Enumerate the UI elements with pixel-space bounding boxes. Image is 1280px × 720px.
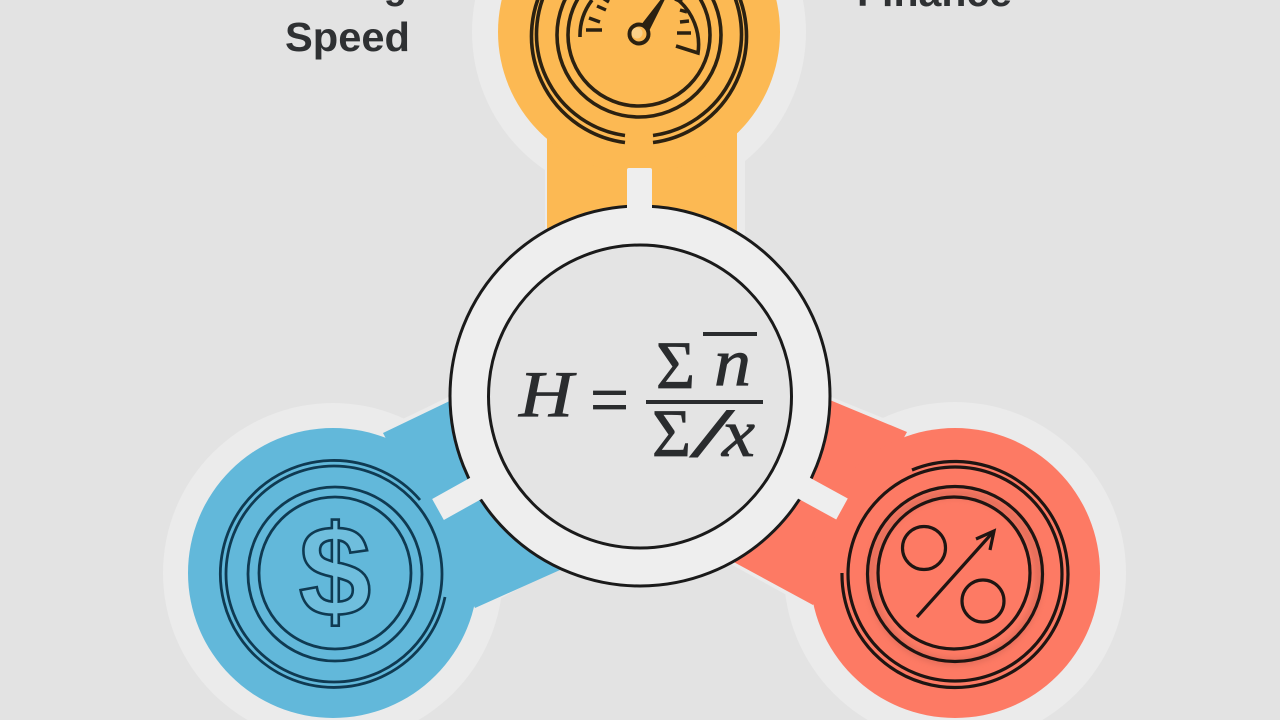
icon: dollar coin [220, 460, 445, 687]
blue halo [163, 402, 548, 720]
formula [518, 324, 763, 471]
dollar sign: $ [299, 498, 371, 644]
formula: H [518, 358, 577, 431]
formula: Σ [656, 327, 695, 403]
connector tab: top [627, 168, 652, 218]
connector tab: left [438, 480, 490, 510]
red halo [737, 402, 1126, 720]
node: yellow speed [472, 0, 806, 250]
node: blue finance [163, 396, 560, 720]
label: top left: Speed [285, 14, 410, 60]
outer ring [450, 206, 830, 586]
blue stem and disc [188, 396, 560, 718]
connector tab: right [790, 480, 842, 509]
icon: speedometer [532, 0, 746, 142]
inner circle [488, 245, 792, 548]
yellow stem and disc [498, 0, 780, 250]
yellow halo [472, 0, 806, 240]
formula: / [690, 395, 734, 471]
icon: percent rising [842, 462, 1068, 688]
node: red percent [730, 398, 1126, 720]
formula: Σ [652, 395, 691, 471]
formula: = [590, 360, 629, 440]
center hub [438, 168, 842, 586]
red stem and disc [730, 398, 1100, 718]
formula: x [721, 395, 755, 471]
formula: n [714, 324, 751, 400]
